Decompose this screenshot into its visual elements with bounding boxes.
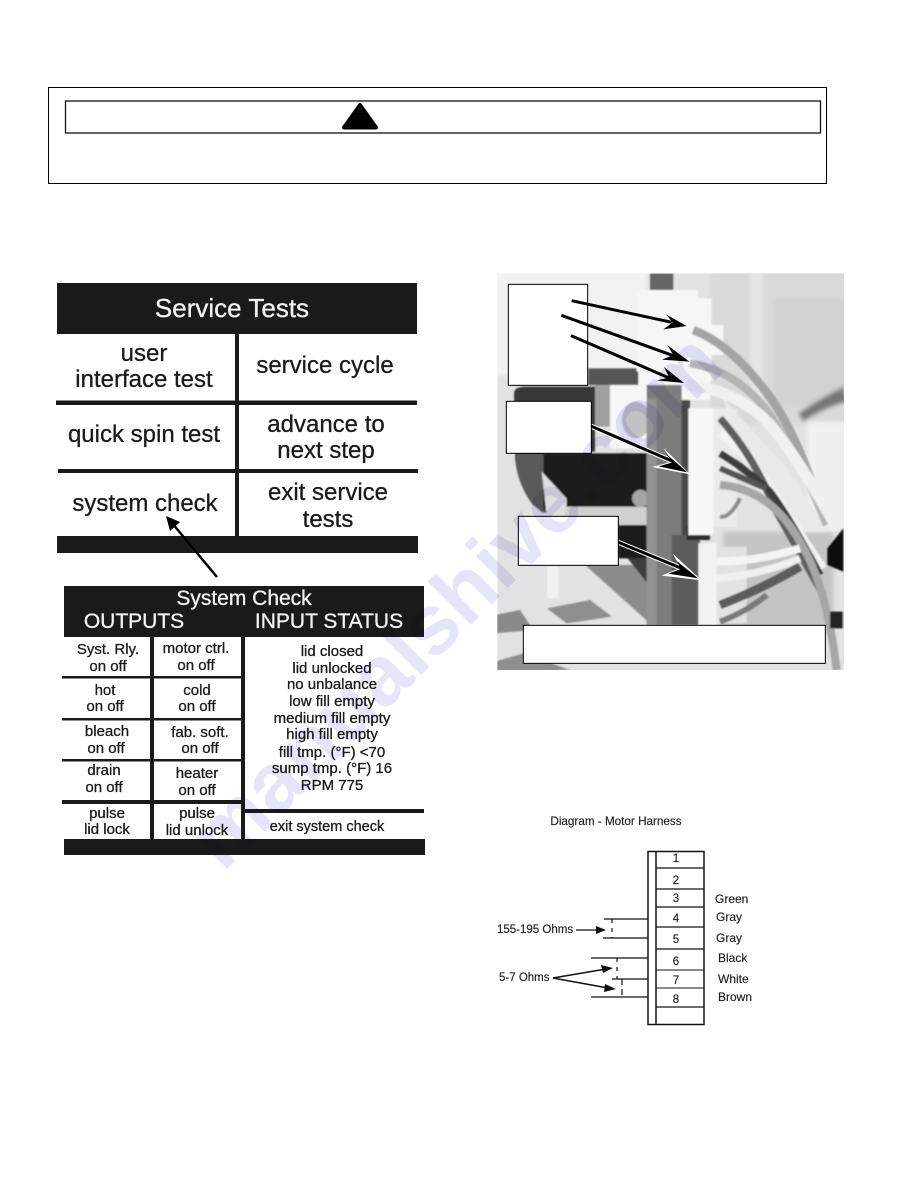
heading: system check: INPUT STATUS — [255, 610, 403, 633]
outputs column: on off — [177, 657, 215, 674]
wire colour labels — [715, 892, 752, 1004]
menu item: quick spin test: quick spin test — [68, 421, 220, 448]
capacitor and motor — [514, 387, 595, 513]
warning heading bar — [66, 101, 820, 133]
input status column: low fill empty — [289, 693, 375, 710]
outputs column: on off — [178, 698, 216, 715]
arrows: photo callouts — [561, 301, 702, 580]
outputs column: on off — [89, 658, 127, 675]
outputs column: pulse — [179, 805, 215, 822]
wire colour labels: Brown — [718, 990, 752, 1004]
upper connector group — [650, 273, 673, 290]
menu item: system check: system check — [72, 490, 219, 517]
photo: wiring connectors on control board — [493, 268, 850, 673]
outputs column: pulse — [89, 805, 125, 822]
connector block — [648, 851, 704, 1025]
pin numbers: 8 — [673, 994, 679, 1006]
wire colour labels: Black — [718, 951, 748, 965]
caption box — [523, 625, 825, 663]
menu item: user interface test: interface test — [75, 366, 213, 393]
pin numbers: 3 — [673, 893, 679, 905]
input status column: RPM 775 — [301, 777, 363, 794]
pin numbers: 7 — [673, 975, 679, 987]
outputs column: cold — [183, 682, 211, 699]
floor patches — [547, 600, 612, 623]
pin numbers: 1 — [673, 853, 679, 865]
wires — [723, 398, 827, 532]
callout box: lower connector — [518, 516, 618, 565]
pin numbers: 2 — [673, 875, 679, 887]
outputs column: on off — [181, 740, 219, 757]
outputs column: fab. soft. — [171, 724, 229, 741]
diagram: motor harness — [497, 815, 752, 1025]
callout box: upper connectors — [508, 284, 588, 385]
outputs column: on off — [85, 779, 123, 796]
outputs column: on off — [178, 782, 216, 799]
heading: system check — [64, 586, 424, 637]
pin numbers — [673, 853, 680, 1006]
outputs column: bleach — [85, 723, 129, 740]
menu item: advance to next step: advance to — [267, 411, 385, 438]
heading: service tests: Service Tests — [155, 293, 309, 323]
wire colour labels: White — [718, 972, 749, 986]
outputs column: Syst. Rly. — [77, 641, 139, 658]
menu grid lines — [56, 334, 418, 553]
heading: system check: OUTPUTS — [84, 610, 184, 633]
menu item: exit service tests: exit service — [268, 479, 388, 506]
label: 155-195 ohms with arrow: 155-195 Ohms — [497, 924, 573, 936]
circuit board edge — [647, 380, 683, 625]
outputs column — [77, 640, 229, 839]
exit system check: exit system check — [270, 819, 385, 835]
pin numbers: 6 — [673, 956, 679, 968]
outputs column: lid unlock — [166, 822, 229, 839]
menu item: exit service tests: tests — [303, 506, 353, 533]
input status column: high fill empty — [286, 726, 378, 743]
outputs column: hot — [95, 682, 115, 699]
label: 155-195 ohms with arrow — [497, 924, 606, 936]
input status column: lid closed — [301, 643, 363, 660]
warning box — [48, 88, 826, 184]
menu item: advance to next step: next step — [277, 437, 375, 464]
wire colour labels: Green — [715, 892, 748, 906]
heading: service tests — [57, 283, 417, 334]
wire colour labels: Gray — [716, 931, 742, 945]
outputs column: on off — [86, 698, 124, 715]
input status column: medium fill empty — [274, 710, 391, 727]
pin numbers: 4 — [673, 913, 680, 925]
wire colour labels: Gray — [716, 910, 742, 924]
input status column: sump tmp. (°F) 16 — [272, 760, 392, 777]
system check grid lines — [62, 637, 425, 855]
outputs column: drain — [87, 762, 121, 779]
arrow: system check screen to menu item — [166, 516, 217, 577]
pin numbers: 5 — [673, 934, 679, 946]
menu item: service cycle: service cycle — [256, 352, 394, 379]
input status column — [272, 643, 392, 794]
outputs column: motor ctrl. — [163, 640, 229, 657]
lower white connector — [715, 547, 747, 623]
outputs column: on off — [87, 740, 125, 757]
wires and meter test points — [591, 919, 648, 998]
input status column: fill tmp. (°F) <70 — [279, 744, 385, 761]
callout box: main connector — [506, 401, 591, 453]
input status column: no unbalance — [287, 676, 377, 693]
icon: warning triangle — [344, 105, 376, 128]
panel: service tests menu — [56, 283, 418, 553]
label: 5-7 ohms with arrows — [499, 965, 616, 992]
panel: system check screen — [62, 586, 425, 855]
outputs column: lid lock — [84, 821, 130, 838]
label: 5-7 ohms with arrows: 5-7 Ohms — [499, 972, 550, 984]
heading: system check: System Check — [176, 587, 312, 610]
menu item: user interface test: user — [121, 340, 167, 367]
watermark: manualshive.com — [169, 315, 741, 886]
main white connector — [712, 408, 737, 527]
outputs column: heater — [176, 765, 218, 782]
input status column: lid unlocked — [292, 660, 372, 677]
diagram title: Diagram - Motor Harness — [550, 815, 682, 828]
